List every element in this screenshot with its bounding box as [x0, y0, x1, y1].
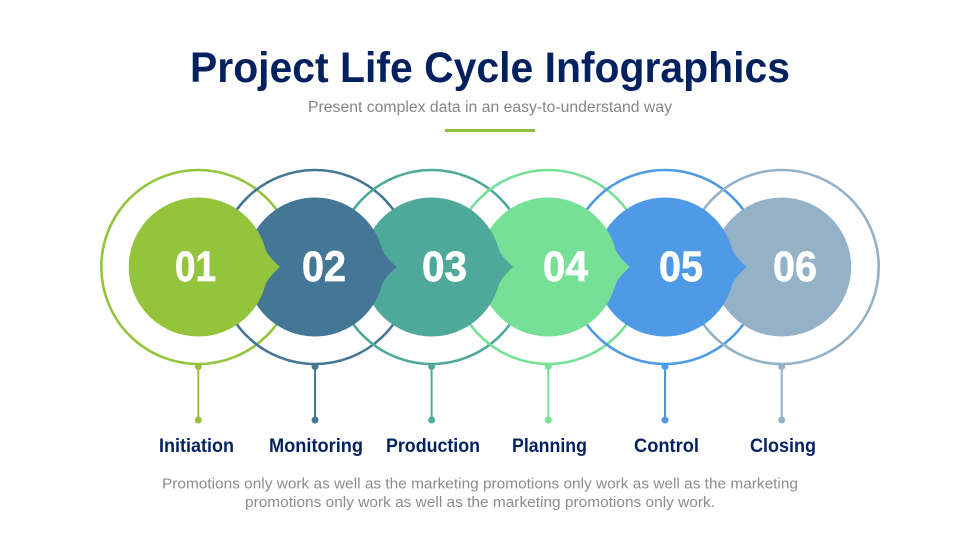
- disc 04 with arrow: [479, 197, 630, 336]
- step 1 ring and connector: [101, 170, 295, 424]
- step 4 ring and connector: [451, 170, 645, 424]
- label Closing: Closing: [750, 436, 816, 457]
- disc 02 with arrow: [245, 197, 397, 336]
- number 05: 05: [659, 243, 703, 291]
- step 3 ring and connector: [335, 170, 529, 424]
- body text: promotions only work as well as the marketing promotions only work.: [245, 494, 715, 511]
- number 03: 03: [422, 243, 467, 291]
- label Control: Control: [634, 436, 699, 457]
- disc 01 with arrow: [129, 197, 280, 336]
- number 06: 06: [773, 243, 817, 291]
- step 5 ring and connector: [568, 170, 762, 424]
- disc 06: [712, 198, 851, 336]
- subtitle: Present complex data in an easy-to-understand way: [308, 99, 672, 116]
- number 04: 04: [543, 243, 588, 291]
- title: Project Life Cycle Infographics: [190, 44, 790, 92]
- label Monitoring: Monitoring: [269, 436, 363, 457]
- label Planning: Planning: [512, 436, 587, 457]
- label Initiation: Initiation: [159, 436, 234, 457]
- number 01: 01: [175, 243, 216, 291]
- disc 03 with arrow: [362, 197, 513, 336]
- step 6 ring and connector: [685, 170, 879, 424]
- body text: [162, 476, 798, 511]
- disc 05 with arrow: [595, 197, 747, 336]
- accent underline: [445, 129, 535, 132]
- outer rings and connectors: [101, 170, 879, 424]
- step 2 ring and connector: [218, 170, 412, 424]
- label Production: Production: [386, 436, 480, 457]
- body text: Promotions only work as well as the marketing promotions only work as well as the marketing: [162, 476, 798, 492]
- number 02: 02: [302, 243, 346, 291]
